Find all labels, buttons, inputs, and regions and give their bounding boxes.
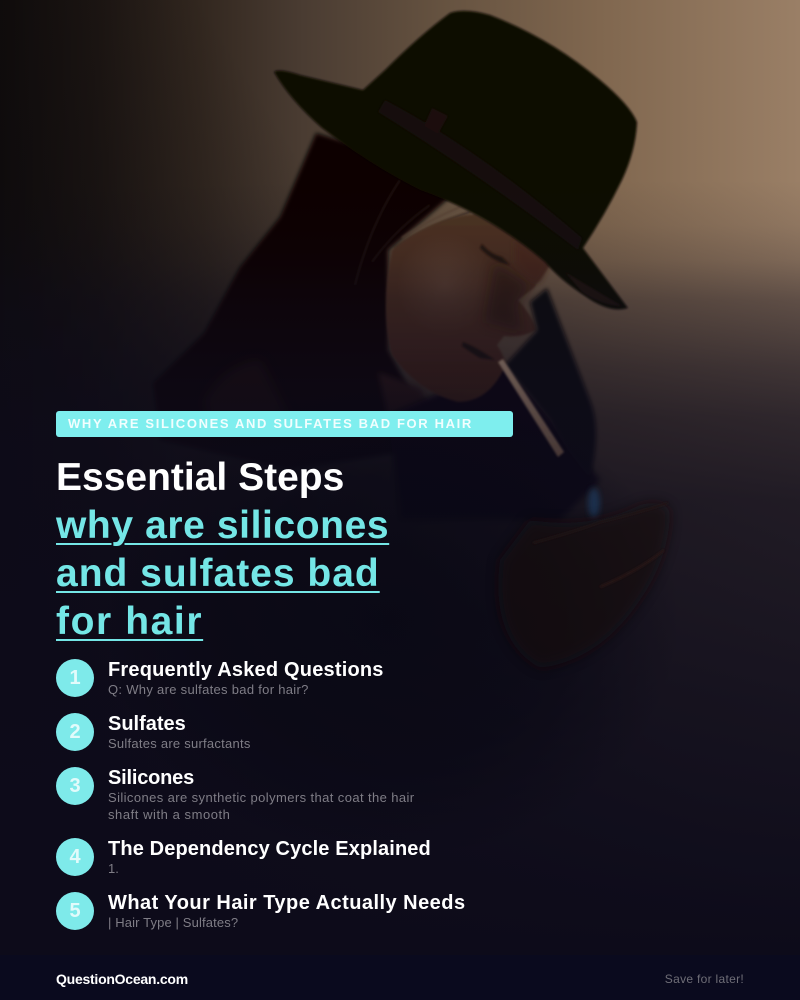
lighter flame glow (588, 488, 600, 518)
face (386, 214, 556, 402)
footer bar (0, 955, 800, 1000)
step 3 description: shaft with a smooth (108, 807, 230, 822)
long dark hair (153, 133, 470, 470)
hair strands right of face (505, 288, 596, 478)
heading highlighted topic: for hair (56, 600, 203, 643)
heading (56, 456, 390, 643)
hat (274, 11, 637, 310)
step 2 number (56, 713, 94, 751)
dark lower body (100, 380, 680, 860)
step 3 description (108, 790, 415, 822)
step 3 number (56, 767, 94, 805)
step 1 number: 1 (69, 667, 81, 689)
step 2 number: 2 (69, 721, 81, 743)
step 2 title: Sulfates (108, 713, 186, 735)
step 4 number (56, 838, 94, 876)
step 5 number: 5 (69, 900, 81, 922)
step 2 description: Sulfates are surfactants (108, 736, 251, 751)
shoulder (205, 360, 290, 430)
neck (378, 372, 432, 416)
step 3 (56, 767, 415, 822)
badge text: WHY ARE SILICONES AND SULFATES BAD FOR HAIR (68, 416, 473, 431)
step 1 title: Frequently Asked Questions (108, 659, 384, 681)
step 3 number: 3 (69, 775, 81, 797)
hand (498, 503, 670, 668)
heading highlighted topic: why are silicones (56, 504, 389, 547)
step 3 title: Silicones (108, 767, 194, 789)
heading line: essential steps: Essential Steps (56, 456, 344, 499)
step 4 number: 4 (69, 846, 81, 868)
save note: Save for later! (665, 972, 744, 986)
category badge (56, 411, 513, 437)
step 2 (56, 713, 251, 751)
step 1 number (56, 659, 94, 697)
step 1 (56, 659, 384, 697)
heading highlighted topic (56, 504, 390, 643)
step 4 description: 1. (108, 861, 119, 876)
heading highlighted topic: and sulfates bad (56, 552, 380, 595)
eye and lips (462, 244, 510, 360)
step 5 (56, 892, 466, 930)
step 1 description: Q: Why are sulfates bad for hair? (108, 682, 309, 697)
step 5 number (56, 892, 94, 930)
brand name: QuestionOcean.com (56, 971, 188, 987)
cigarette (498, 359, 564, 457)
step 5 title: What Your Hair Type Actually Needs (108, 892, 466, 914)
step 5 description: | Hair Type | Sulfates? (108, 915, 238, 930)
step 4 title: The Dependency Cycle Explained (108, 838, 431, 860)
step 3 description: Silicones are synthetic polymers that coat the hair (108, 790, 415, 805)
hat band (378, 100, 622, 306)
chest shadow under chin (388, 365, 600, 520)
step 4 (56, 838, 431, 876)
